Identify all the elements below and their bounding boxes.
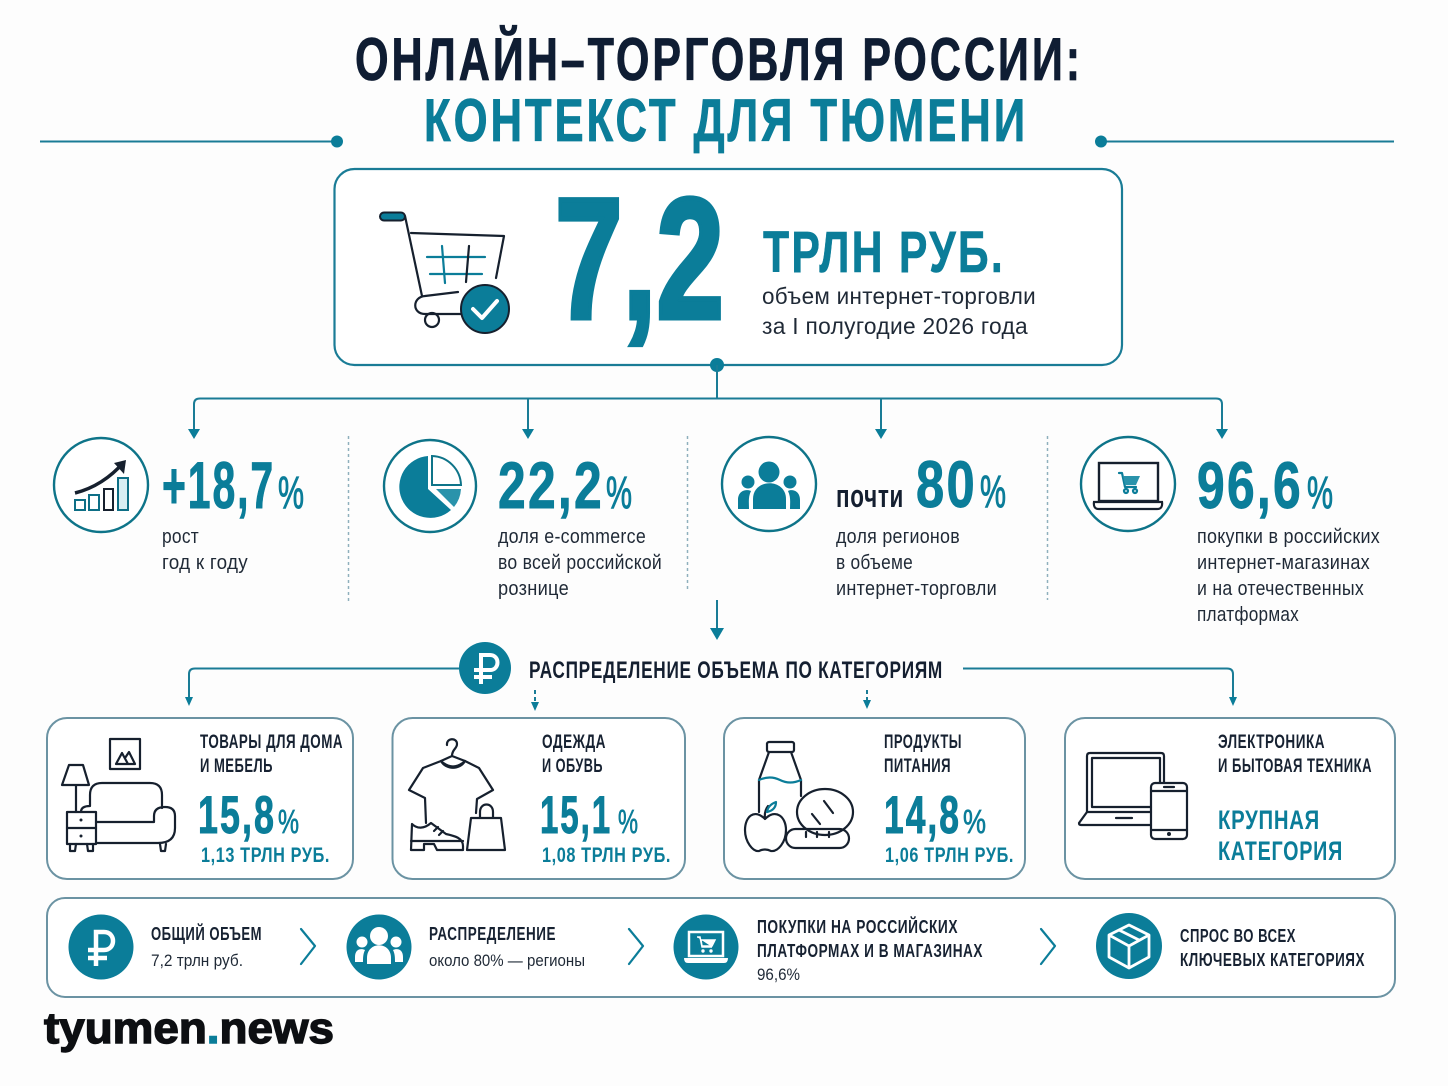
icon: food [745, 742, 853, 851]
step: distribution: около 80% — регионы [429, 951, 585, 970]
title [355, 26, 1083, 154]
value: почти [836, 478, 904, 514]
step: distribution [346, 914, 585, 980]
panel: main figure [334, 163, 1122, 365]
description: рост [162, 526, 199, 548]
step: demand [1096, 913, 1365, 979]
label: ПРОДУКТЫ [884, 732, 962, 753]
stat: share [384, 440, 662, 600]
icon: shopping cart [380, 212, 509, 333]
value: % [963, 803, 986, 840]
description: интернет-торговли [836, 578, 997, 600]
label [1218, 732, 1372, 777]
amount: 1,08 ТРЛН РУБ. [542, 843, 671, 867]
icon: ruble [459, 642, 511, 694]
label: ПИТАНИЯ [884, 756, 951, 777]
arrow [629, 929, 643, 964]
step: demand: КЛЮЧЕВЫХ КАТЕГОРИЯХ [1180, 950, 1365, 970]
label: ЭЛЕКТРОНИКА [1218, 732, 1325, 753]
card: food [724, 718, 1025, 879]
description: доля e-commerce [498, 526, 646, 548]
value: % [278, 467, 304, 518]
description: доля регионов [836, 526, 960, 548]
stat: growth [54, 438, 304, 574]
unit: ТРЛН РУБ. [763, 220, 1005, 285]
value: % [1307, 467, 1333, 518]
description [1197, 526, 1380, 626]
step: platforms [674, 914, 983, 984]
highlight: КРУПНАЯ [1218, 805, 1320, 835]
category connectors [185, 668, 1237, 711]
description [836, 526, 997, 600]
arrow [301, 929, 315, 964]
main description: объем интернет-торговли [762, 283, 1036, 309]
step: platforms: ПЛАТФОРМАХ И В МАГАЗИНАХ [757, 941, 983, 961]
description: и на отечественных [1197, 578, 1364, 600]
value: % [606, 467, 632, 518]
card: clothes [392, 718, 685, 879]
value: 14,8 [884, 786, 961, 845]
main description: за I полугодие 2026 года [762, 313, 1028, 339]
value: 22,2 [498, 448, 604, 522]
main description [762, 283, 1036, 339]
panel: summary chain [47, 898, 1395, 997]
value: % [980, 466, 1006, 517]
title: КОНТЕКСТ ДЛЯ ТЮМЕНИ [424, 87, 1028, 154]
description: во всей российской [498, 552, 662, 574]
category heading: РАСПРЕДЕЛЕНИЕ ОБЪЕМА ПО КАТЕГОРИЯМ [529, 657, 943, 684]
value: 80 [916, 447, 977, 521]
step: total: 7,2 трлн руб. [151, 951, 243, 970]
label: И ОБУВЬ [542, 756, 603, 777]
title: ОНЛАЙН–ТОРГОВЛЯ РОССИИ: [355, 26, 1083, 93]
icon: clothes [409, 739, 505, 850]
category heading [459, 642, 943, 694]
amount: 1,06 ТРЛН РУБ. [885, 843, 1014, 867]
highlight [1218, 805, 1343, 866]
card: electronics [1065, 718, 1395, 879]
description [162, 526, 248, 574]
label: И БЫТОВАЯ ТЕХНИКА [1218, 756, 1372, 777]
icon: laptop with cart [1081, 437, 1175, 531]
highlight: КАТЕГОРИЯ [1218, 836, 1343, 866]
description: рознице [498, 578, 569, 600]
description: покупки в российских [1197, 526, 1380, 548]
big number: 7,2 [555, 163, 724, 355]
label: ТОВАРЫ ДЛЯ ДОМА [200, 732, 343, 753]
value: +18,7 [162, 448, 275, 522]
card: home [47, 718, 353, 879]
connector tree [188, 358, 1228, 439]
stat: russian platforms [1081, 437, 1380, 626]
label [542, 732, 606, 777]
logo: tyumen.news [44, 1004, 334, 1053]
value: % [278, 803, 299, 840]
label: И МЕБЕЛЬ [200, 756, 273, 777]
arrow [1041, 929, 1055, 964]
icon: people [722, 437, 816, 531]
icon: pie chart [384, 440, 476, 532]
description: год к году [162, 552, 248, 574]
value [836, 447, 1006, 521]
value: % [618, 803, 638, 840]
value: 96,6 [1197, 448, 1303, 522]
description: интернет-магазинах [1197, 552, 1370, 574]
value: 15,8 [198, 786, 276, 845]
icon: furniture [62, 739, 175, 851]
step: platforms: 96,6% [757, 965, 800, 984]
value: 15,1 [540, 786, 612, 845]
step: distribution: РАСПРЕДЕЛЕНИЕ [429, 924, 556, 944]
icon: devices [1079, 753, 1187, 839]
stat: regions [722, 437, 1006, 600]
step: platforms: ПОКУПКИ НА РОССИЙСКИХ [757, 916, 958, 937]
label: ОДЕЖДА [542, 732, 606, 753]
step: demand: СПРОС ВО ВСЕХ [1180, 926, 1296, 946]
label [200, 732, 343, 777]
label [884, 732, 962, 777]
description: платформах [1197, 604, 1299, 626]
step: total: ОБЩИЙ ОБЪЕМ [151, 923, 262, 944]
arrow: to categories [710, 600, 724, 640]
icon: growth chart [54, 438, 148, 532]
step: total [68, 914, 262, 980]
description [498, 526, 662, 600]
description: в объеме [836, 552, 913, 574]
amount: 1,13 ТРЛН РУБ. [201, 843, 330, 867]
